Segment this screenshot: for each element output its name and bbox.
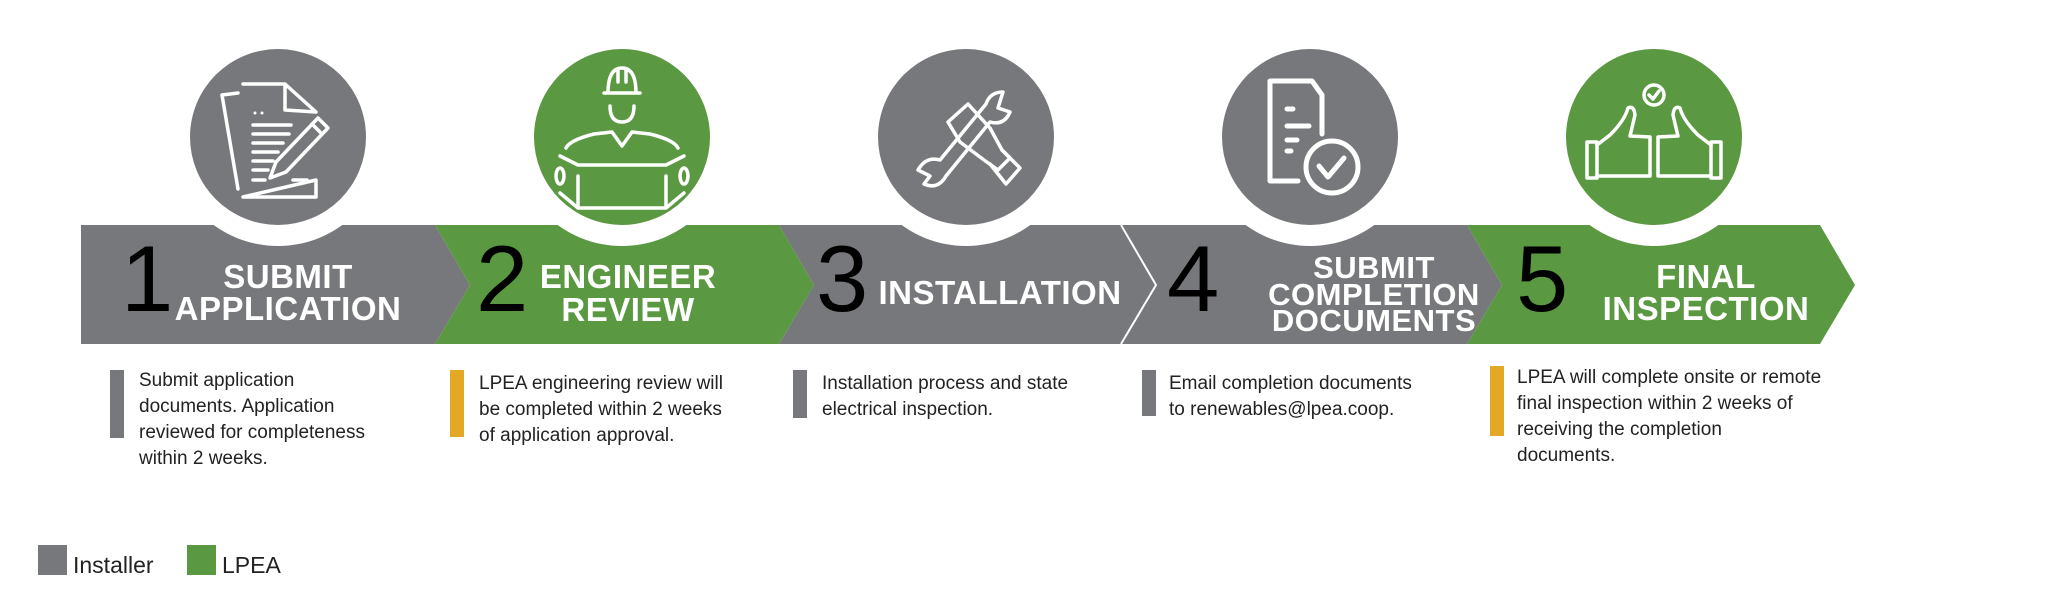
description 1: Submit application <box>139 370 294 391</box>
process banner <box>81 225 1855 344</box>
step 5 heading: 5 <box>1516 226 1568 331</box>
step 4 heading: SUBMIT <box>1313 250 1435 285</box>
step 4 heading <box>1167 226 1480 338</box>
icon circle 4: document with check <box>1201 28 1419 246</box>
description 2: of application approval. <box>479 425 674 446</box>
description 3 <box>793 370 1068 420</box>
step 4 heading: COMPLETION <box>1268 277 1480 312</box>
step 2 heading: ENGINEER <box>540 258 716 295</box>
step 3 heading: INSTALLATION <box>878 274 1122 311</box>
description 5 <box>1490 366 1821 466</box>
step 5 heading: FINAL <box>1656 258 1756 295</box>
step 1 heading: SUBMIT <box>223 258 353 295</box>
step 4 heading: 4 <box>1167 226 1219 331</box>
step 2 heading: 2 <box>476 226 528 331</box>
description 2: LPEA engineering review will <box>479 373 723 394</box>
legend <box>38 545 281 578</box>
step 3 heading: 3 <box>816 226 868 331</box>
description 5: documents. <box>1517 445 1615 466</box>
description 4: to renewables@lpea.coop. <box>1169 399 1394 420</box>
step 5 heading: INSPECTION <box>1603 290 1809 327</box>
step 1 heading: 1 <box>121 226 173 331</box>
step 5 heading <box>1516 226 1809 331</box>
icon circle 1: application document <box>169 28 387 246</box>
description 2 <box>450 370 723 446</box>
description 5: receiving the completion <box>1517 419 1722 440</box>
description 1: documents. Application <box>139 396 334 417</box>
step 1 heading: APPLICATION <box>175 290 401 327</box>
description 1 <box>110 370 365 469</box>
description 2: be completed within 2 weeks <box>479 399 722 420</box>
step 1 heading <box>121 226 401 331</box>
description 3: Installation process and state <box>822 373 1068 394</box>
icon circle 2: engineer <box>513 28 731 246</box>
description 5: final inspection within 2 weeks of <box>1517 393 1793 414</box>
step 2 heading <box>476 226 716 331</box>
step 2 heading: REVIEW <box>561 291 695 328</box>
legend: LPEA <box>222 552 281 578</box>
legend: Installer <box>73 552 154 578</box>
icon circle 3: hand with wrench <box>857 28 1075 246</box>
description 1: within 2 weeks. <box>138 448 268 469</box>
step 3 heading <box>816 226 1122 331</box>
description 5: LPEA will complete onsite or remote <box>1517 367 1821 388</box>
description 3: electrical inspection. <box>822 399 993 420</box>
icon circle 5: thumbs up <box>1545 28 1763 246</box>
description 4: Email completion documents <box>1169 373 1412 394</box>
step 4 heading: DOCUMENTS <box>1272 303 1476 338</box>
description 4 <box>1142 370 1412 420</box>
description 1: reviewed for completeness <box>139 422 365 443</box>
